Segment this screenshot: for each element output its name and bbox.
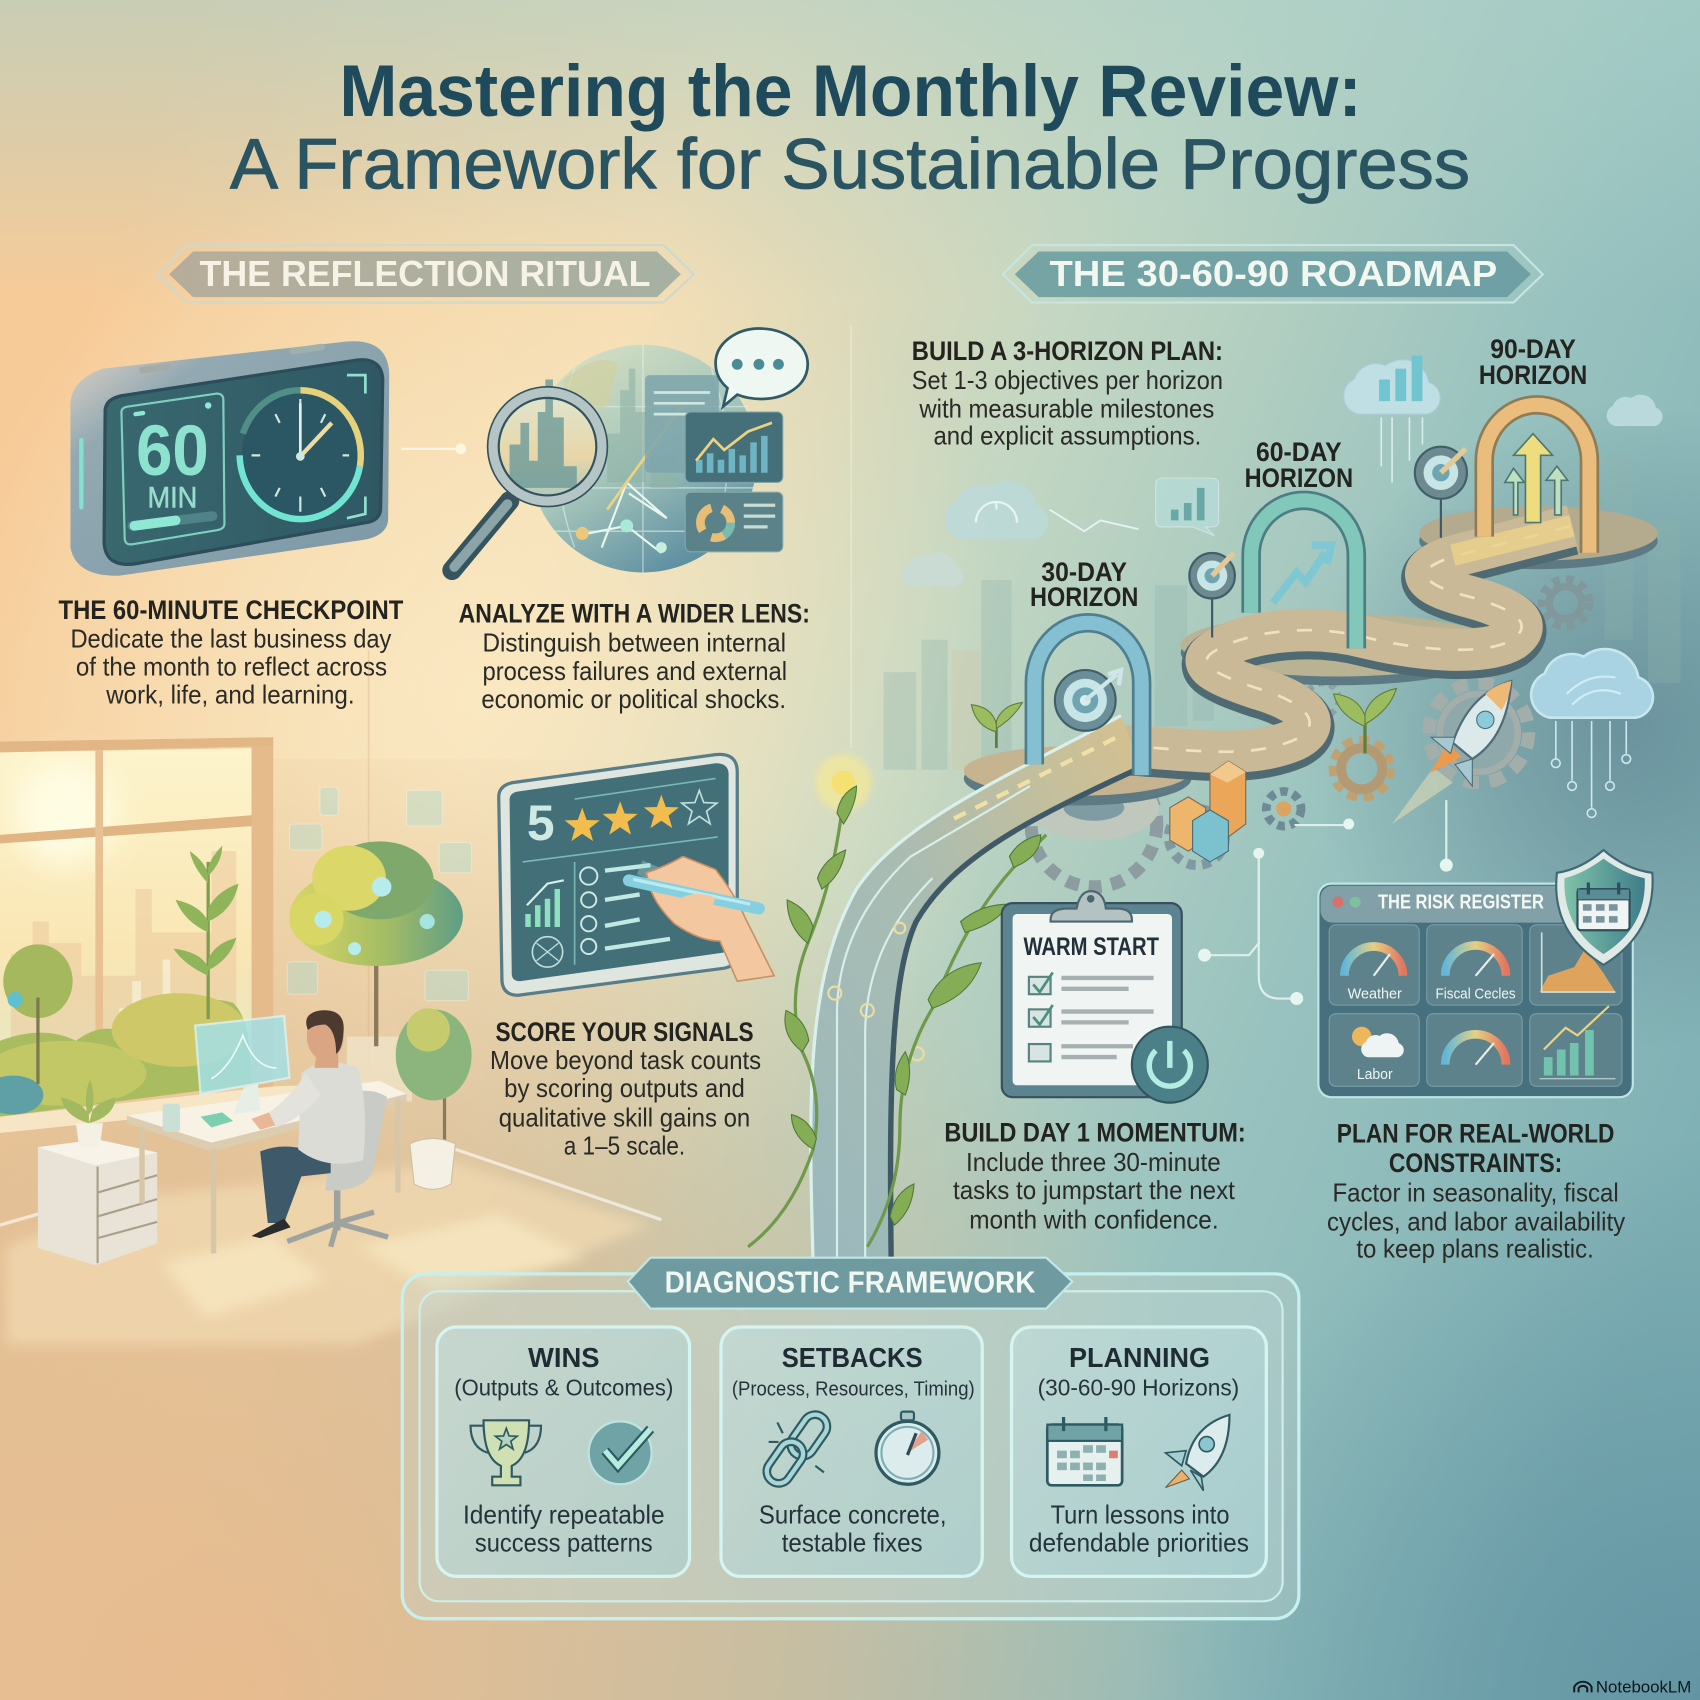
icon: warm start clipboard — [1002, 891, 1208, 1103]
icon: globe, magnifier and data panels — [452, 329, 808, 572]
icon: broken chain — [762, 1410, 832, 1488]
text block: build a 3-horizon plan — [912, 335, 1223, 451]
label: 30-day horizon — [1030, 556, 1138, 612]
text block: analyze with a wider lens: economic or political shocks. — [481, 684, 786, 714]
text block: build day 1 momentum: tasks to jumpstart the next — [953, 1175, 1236, 1205]
icon: shield with calendar — [1556, 850, 1653, 965]
text block: the 60-minute checkpoint: Dedicate the last business day — [70, 623, 391, 653]
icon: 60 minute timer device: 60 — [136, 411, 209, 491]
text block: the 60-minute checkpoint: THE 60-MINUTE CHECKPOINT — [59, 594, 404, 625]
icon: rocket — [1165, 1415, 1229, 1491]
icon: 60 minute timer device — [70, 341, 389, 576]
illustration: city skyline behind roadmap — [884, 455, 1680, 775]
text block: score your signals: Move beyond task counts — [490, 1045, 761, 1075]
connector lines to risk register — [1198, 800, 1453, 1005]
text block: score your signals: SCORE YOUR SIGNALS — [495, 1016, 754, 1047]
gate: 60-day horizon — [1189, 500, 1356, 648]
card: setbacks: testable fixes — [782, 1527, 923, 1557]
title — [230, 49, 1470, 205]
icon: calendar — [1047, 1417, 1122, 1485]
icon: saplings on platforms — [971, 688, 1396, 754]
text block: build a 3-horizon plan: and explicit assumptions. — [933, 421, 1201, 451]
text block: plan for real-world constraints — [1327, 1118, 1625, 1264]
label: 30-day horizon: 30-DAY — [1041, 556, 1127, 587]
label: 60-day horizon: 60-DAY — [1256, 436, 1342, 467]
text block: score your signals — [490, 1016, 761, 1161]
gate: 90-day horizon — [1415, 405, 1589, 553]
panel: the risk register dashboard: Labor — [1357, 1066, 1393, 1083]
card: wins: (Outputs & Outcomes) — [454, 1374, 673, 1400]
text block: build day 1 momentum — [944, 1117, 1246, 1234]
text block: plan for real-world constraints: cycles, and labor availability — [1327, 1207, 1625, 1237]
text block: build day 1 momentum: month with confidence. — [969, 1204, 1219, 1234]
heading: diagnostic framework tab: DIAGNOSTIC FRAMEWORK — [665, 1266, 1035, 1299]
text block: analyze with a wider lens: ANALYZE WITH A WIDER LENS: — [459, 597, 810, 628]
illustration: person working in sunlit office — [0, 651, 661, 1344]
text block: the 60-minute checkpoint — [59, 594, 404, 710]
gears under roadmap — [1029, 579, 1589, 887]
text block: build a 3-horizon plan: with measurable milestones — [918, 393, 1214, 423]
icon: 60 minute timer device: MIN — [147, 482, 197, 514]
icon: rocket with flame trail — [1392, 681, 1511, 824]
icon: rising block chart — [1170, 761, 1246, 862]
vines with leaves and light bulb — [748, 755, 1046, 1247]
gate: 30-day horizon — [1034, 623, 1142, 775]
icon: rating tablet with hand and stylus — [499, 754, 774, 995]
card: wins: success patterns — [475, 1527, 653, 1557]
logo: NotebookLM watermark: NotebookLM — [1596, 1678, 1691, 1696]
text block: analyze with a wider lens: Distinguish between internal — [482, 628, 786, 658]
card: setbacks: SETBACKS — [782, 1341, 923, 1373]
text block: plan for real-world constraints: to keep plans realistic. — [1356, 1234, 1594, 1264]
card: setbacks — [721, 1327, 982, 1576]
icon: trophy — [471, 1420, 541, 1485]
label: 90-day horizon: HORIZON — [1479, 359, 1587, 390]
text block: plan for real-world constraints: Factor in seasonality, fiscal — [1332, 1177, 1619, 1207]
text block: score your signals: qualitative skill gains on — [499, 1102, 750, 1132]
text block: the 60-minute checkpoint: work, life, and learning. — [105, 680, 355, 710]
card: wins: Identify repeatable — [463, 1499, 665, 1529]
text block: plan for real-world constraints: PLAN FOR REAL-WORLD — [1337, 1118, 1614, 1149]
card: planning — [1012, 1327, 1266, 1576]
card: planning: PLANNING — [1069, 1341, 1210, 1373]
text block: analyze with a wider lens: process failures and external — [482, 656, 787, 686]
title: A Framework for Sustainable Progress — [230, 125, 1470, 205]
panel: the risk register dashboard: THE RISK REGISTER — [1378, 891, 1544, 914]
card: planning: defendable priorities — [1029, 1527, 1249, 1557]
banner: the reflection ritual: THE REFLECTION RITUAL — [199, 254, 651, 294]
label: 60-day horizon: HORIZON — [1245, 462, 1353, 493]
card: planning: (30-60-90 Horizons) — [1038, 1374, 1239, 1400]
text block: analyze with a wider lens — [459, 597, 810, 714]
panel: the risk register dashboard: Weather — [1348, 986, 1402, 1003]
title: Mastering the Monthly Review: — [339, 49, 1362, 132]
panel: the risk register dashboard — [1318, 884, 1633, 1097]
icon: check circle — [589, 1421, 652, 1484]
roadmap: winding road with three platforms — [811, 506, 1658, 1263]
label: 30-day horizon: HORIZON — [1030, 581, 1138, 612]
text block: build a 3-horizon plan: Set 1-3 objectives per horizon — [912, 365, 1223, 395]
icon: warm start clipboard: WARM START — [1023, 933, 1159, 961]
heading: diagnostic framework tab — [628, 1258, 1072, 1309]
card: wins — [437, 1327, 690, 1576]
text block: build day 1 momentum: BUILD DAY 1 MOMENTUM: — [944, 1117, 1246, 1148]
label: 90-day horizon — [1479, 333, 1587, 390]
label: 60-day horizon — [1245, 436, 1353, 493]
card: setbacks: (Process, Resources, Timing) — [732, 1377, 975, 1400]
icon: rating tablet with hand and stylus: 5 — [527, 795, 555, 851]
text block: build a 3-horizon plan: BUILD A 3-HORIZON PLAN: — [912, 335, 1223, 366]
panel: diagnostic framework — [402, 1258, 1299, 1619]
text block: the 60-minute checkpoint: of the month to reflect across — [76, 651, 387, 681]
panel: the risk register dashboard: Fiscal Cecles — [1435, 986, 1516, 1003]
card: setbacks: Surface concrete, — [759, 1499, 946, 1529]
text block: build day 1 momentum: Include three 30-minute — [966, 1147, 1221, 1177]
clouds and floating chart bubble — [902, 356, 1663, 817]
banner: the reflection ritual — [157, 245, 694, 302]
card: wins: WINS — [528, 1341, 600, 1373]
card: planning: Turn lessons into — [1051, 1499, 1229, 1529]
text block: plan for real-world constraints: CONSTRAINTS: — [1389, 1147, 1562, 1178]
text block: score your signals: a 1–5 scale. — [564, 1131, 685, 1161]
text block: score your signals: by scoring outputs and — [504, 1073, 745, 1103]
label: 90-day horizon: 90-DAY — [1490, 333, 1576, 364]
banner: the 30-60-90 roadmap: THE 30-60-90 ROADMAP — [1049, 254, 1497, 294]
icon: stopwatch — [876, 1412, 939, 1484]
banner: the 30-60-90 roadmap — [1003, 245, 1543, 302]
